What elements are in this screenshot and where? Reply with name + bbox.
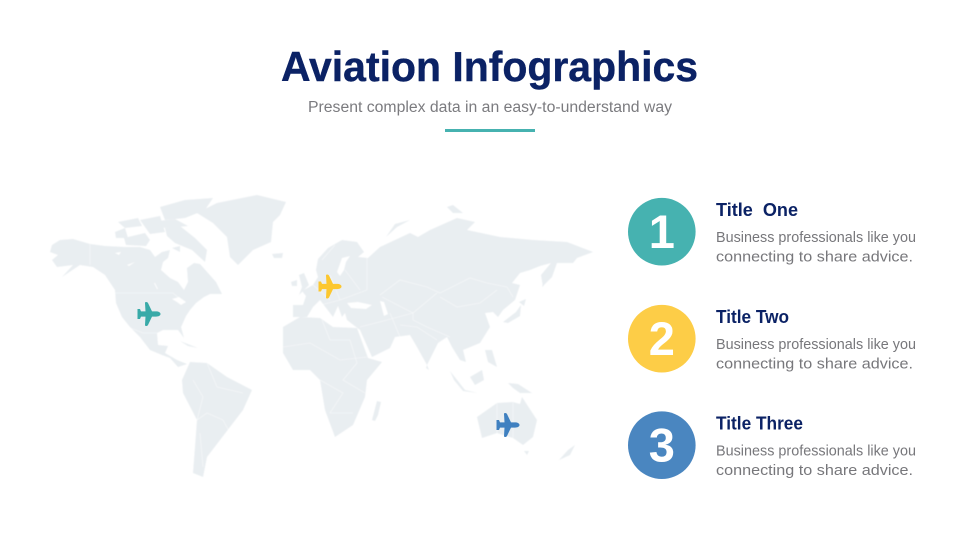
map: land masses [50,195,593,477]
icon: yellow plane over Europe [318,274,342,299]
description 1: connecting to share advice. [716,250,913,266]
title: Aviation Infographics [281,43,698,90]
number badge 1 [628,198,696,266]
map: seas and lakes [115,252,388,316]
description 3: connecting to share advice. [716,463,913,479]
description 2: connecting to share advice. [716,356,913,372]
map: country borders [90,244,513,467]
header [281,43,698,132]
heading 1: Title One [716,199,798,220]
item: Title Two [628,305,916,373]
number badge 1: 1 [649,205,675,258]
world map [50,195,593,477]
subtitle: Present complex data in an easy-to-understand way [308,99,672,116]
icon: blue plane over Australia [496,413,520,437]
description 2: Business professionals like you [716,337,916,353]
icon: teal plane over North America [138,302,160,326]
description 1: Business professionals like you [716,230,916,246]
number badge 3: 3 [649,418,675,472]
heading 3: Title Three [716,412,803,434]
item: Title One [628,198,916,266]
description 3: Business professionals like you [716,444,916,460]
heading 2: Title Two [716,306,789,327]
number badge 2 [628,305,696,373]
title underline [445,129,535,132]
item: Title Three [628,411,916,479]
number badge 2: 2 [649,312,675,365]
number badge 3 [628,411,696,479]
